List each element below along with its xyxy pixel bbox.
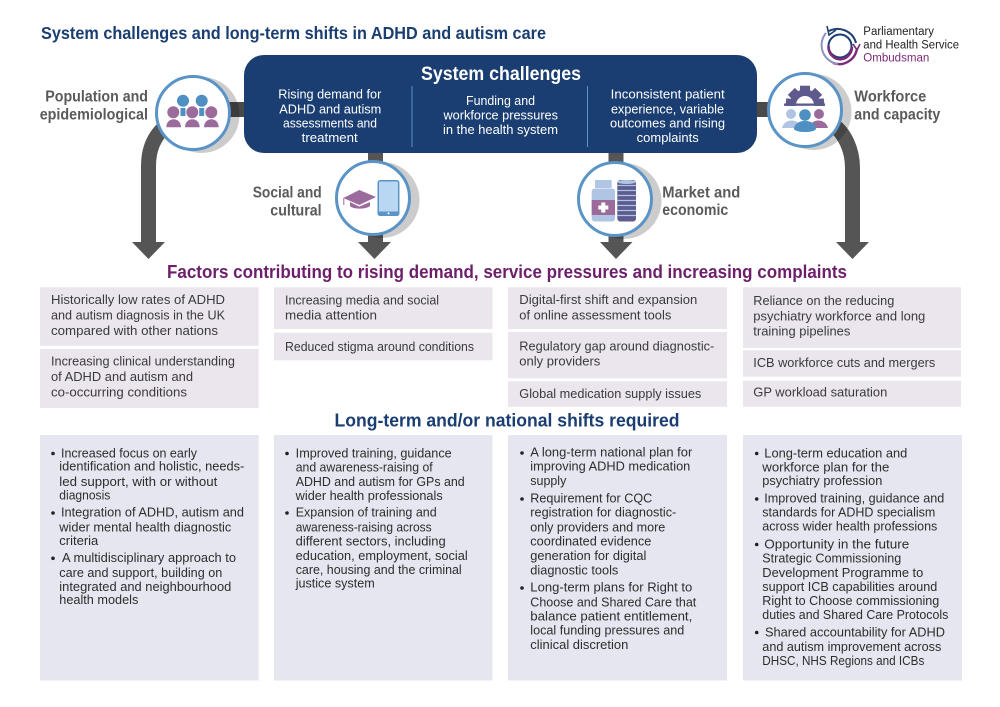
- panel: shifts, social: care, housing and the criminal: [296, 563, 462, 577]
- arrow: population and epidemiological: [132, 102, 247, 259]
- panel: shifts, population: identification and holistic, needs-: [59, 460, 244, 474]
- panel: shifts, market: only providers and more: [530, 521, 665, 535]
- panel: shifts, workforce: workforce plan for the: [761, 460, 889, 474]
- panel: factor, psychiatry workforce: [743, 287, 961, 348]
- heading: factors contributing: Factors contributing to rising demand, service pressures and increasing complaints: [167, 262, 847, 282]
- logo: Parliamentary and Health Service Ombudsman: Parliamentary: [863, 26, 934, 38]
- panel: factor, psychiatry workforce: psychiatry workforce and long: [753, 309, 925, 323]
- panel: factor, media attention: Increasing media and social: [285, 293, 439, 307]
- label: workforce and capacity: and capacity: [854, 107, 941, 124]
- panel: shifts, population: A multidisciplinary approach to: [62, 551, 236, 565]
- panel: shifts, workforce: across wider health professions: [762, 519, 937, 533]
- text: rising demand: treatment: [302, 131, 358, 145]
- panel: factor, clinical understanding: co-occurring conditions: [51, 385, 187, 399]
- logo: Parliamentary and Health Service Ombudsman: [822, 26, 959, 65]
- panel: factor, regulatory gap: only providers: [519, 355, 600, 369]
- label: population and epidemiological: [40, 89, 148, 123]
- panel: factor, reduced stigma: Reduced stigma around conditions: [285, 340, 474, 354]
- panel: shifts, workforce: psychiatry profession: [762, 474, 882, 488]
- panel: shifts, workforce: [743, 435, 962, 680]
- arrow: market and economic: [600, 150, 632, 259]
- panel: factor, digital-first shift: Digital-first shift and expansion: [519, 293, 697, 307]
- panel: shifts, social: Improved training, guidance: [296, 446, 452, 460]
- panel: shifts, social: different sectors, including: [296, 535, 446, 549]
- icon: graduation cap and tablet: [336, 162, 420, 238]
- panel: shifts, social: education, employment, social: [296, 549, 468, 563]
- panel: factor, digital-first shift: [508, 287, 727, 329]
- panel: shifts, population: Increased focus on early: [61, 446, 198, 460]
- panel: factor, ICB cuts: ICB workforce cuts and mergers: [753, 356, 935, 370]
- text: inconsistent patient experience: Inconsistent patient: [611, 87, 725, 101]
- heading: system challenges: System challenges: [421, 64, 581, 85]
- panel: system challenges: [244, 55, 757, 153]
- panel: shifts, workforce: DHSC, NHS Regions and ICBs: [762, 654, 924, 668]
- panel: shifts, population: [40, 435, 259, 680]
- panel: shifts, workforce: Development Programme to: [762, 566, 923, 580]
- label: market and economic: economic: [662, 202, 729, 219]
- panel: shifts, social: justice system: [295, 576, 375, 590]
- icon: medication bottle and coins: [578, 162, 662, 239]
- panel: shifts, population: integrated and neighbourhood: [59, 580, 231, 594]
- panel: factor, media attention: media attention: [285, 309, 377, 323]
- label: market and economic: [662, 184, 740, 219]
- panel: shifts, workforce: Shared accountability for ADHD: [765, 625, 945, 639]
- text: funding and workforce pressures: [442, 94, 558, 137]
- panel: factor, historically low rates: and autism diagnosis in the UK: [51, 308, 226, 322]
- logo: Parliamentary and Health Service Ombudsman: and Health Service: [863, 39, 959, 51]
- panel: factor, medication supply: Global medication supply issues: [519, 387, 701, 401]
- label: social and cultural: Social and: [253, 184, 322, 201]
- panel: shifts, market: Requirement for CQC: [530, 492, 652, 506]
- panel: shifts, market: balance patient entitlement,: [530, 610, 692, 624]
- panel: factor, medication supply: [508, 381, 727, 407]
- text: inconsistent patient experience: [610, 87, 725, 145]
- panel: shifts, market: Long-term plans for Right to: [530, 581, 692, 595]
- text: inconsistent patient experience: outcomes and rising: [610, 116, 725, 130]
- panel: shifts, population: Integration of ADHD, autism and: [61, 506, 244, 520]
- panel: factor, digital-first shift: of online assessment tools: [519, 308, 671, 322]
- panel: shifts, social: wider health professionals: [295, 489, 443, 503]
- text: rising demand: assessments and: [283, 116, 377, 130]
- panel: shifts, population: care and support, building on: [59, 566, 222, 580]
- panel: factor, psychiatry workforce: training pipelines: [753, 325, 850, 339]
- panel: shifts, workforce: Improved training, guidance and: [764, 492, 944, 506]
- panel: shifts, workforce: Right to Choose commissioning: [762, 594, 939, 608]
- label: market and economic: Market and: [662, 184, 740, 201]
- panel: shifts, market: supply: [530, 474, 567, 488]
- panel: shifts, population: wider mental health diagnostic: [58, 521, 231, 535]
- panel: shifts, workforce: Strategic Commissioning: [762, 551, 901, 565]
- panel: shifts, market: A long-term national plan for: [530, 446, 692, 460]
- panel: shifts, population: led support, with or without: [59, 475, 218, 489]
- icon: gear and team: [768, 74, 852, 150]
- panel: shifts, workforce: duties and Shared Care Protocols: [762, 608, 948, 622]
- panel: shifts, workforce: Opportunity in the future: [764, 537, 909, 551]
- panel: shifts, market: Choose and Shared Care that: [530, 596, 697, 610]
- panel: shifts, population: health models: [59, 593, 138, 607]
- panel: factor, historically low rates: compared with other nations: [51, 324, 218, 338]
- panel: shifts, population: criteria: [59, 534, 98, 548]
- label: population and epidemiological: epidemiological: [40, 106, 148, 123]
- panel: shifts, market: diagnostic tools: [530, 563, 618, 577]
- panel: shifts, market: [508, 435, 727, 680]
- arrow: social and cultural: [358, 150, 391, 259]
- logo: Parliamentary and Health Service Ombudsman: Ombudsman: [863, 53, 929, 65]
- panel: factor, historically low rates: [40, 287, 259, 346]
- panel: shifts, market: generation for digital: [530, 549, 646, 563]
- panel: factor, psychiatry workforce: Reliance on the reducing: [753, 294, 894, 308]
- text: funding and workforce pressures: Funding and: [466, 94, 535, 108]
- panel: shifts, workforce: support ICB capabilities around: [762, 580, 937, 594]
- panel: shifts, social: and awareness-raising of: [296, 460, 433, 474]
- panel: factor, regulatory gap: Regulatory gap around diagnostic-: [519, 339, 714, 353]
- panel: factor, clinical understanding: Increasing clinical understanding: [51, 355, 235, 369]
- panel: factor, reduced stigma: [274, 333, 492, 360]
- panel: factor, regulatory gap: [508, 332, 727, 378]
- text: inconsistent patient experience: experience, variable: [611, 102, 724, 116]
- icon: population group: [156, 76, 240, 153]
- heading: long-term shifts: Long-term and/or national shifts required: [334, 411, 680, 431]
- panel: shifts, social: awareness-raising across: [296, 521, 432, 535]
- panel: shifts, market: registration for diagnostic-: [530, 506, 676, 520]
- panel: shifts, market: local funding pressures and: [530, 624, 684, 638]
- text: rising demand: Rising demand for: [278, 87, 381, 101]
- label: workforce and capacity: [854, 88, 941, 124]
- panel: shifts, workforce: and autism improvement across: [762, 640, 941, 654]
- label: population and epidemiological: Population and: [45, 89, 148, 106]
- text: rising demand: [278, 87, 381, 145]
- text: rising demand: ADHD and autism: [279, 102, 381, 116]
- panel: shifts, market: coordinated evidence: [530, 535, 651, 549]
- panel: factor, media attention: [274, 287, 492, 329]
- arrow: workforce and capacity: [755, 102, 869, 259]
- label: social and cultural: [253, 184, 322, 220]
- label: social and cultural: cultural: [270, 203, 322, 220]
- title: System challenges and long-term shifts in ADHD and autism care: [41, 23, 546, 43]
- panel: factor, ICB cuts: [743, 350, 961, 377]
- text: funding and workforce pressures: workforce pressures: [442, 108, 558, 122]
- text: funding and workforce pressures: in the health system: [443, 123, 558, 137]
- panel: shifts, population: diagnosis: [59, 488, 110, 502]
- panel: shifts, workforce: Long-term education and: [764, 446, 907, 460]
- panel: shifts, social: ADHD and autism for GPs and: [296, 475, 465, 489]
- panel: shifts, market: clinical discretion: [530, 638, 628, 652]
- panel: shifts, workforce: standards for ADHD specialism: [762, 506, 935, 520]
- panel: shifts, market: improving ADHD medication: [530, 460, 690, 474]
- panel: factor, clinical understanding: [40, 349, 259, 408]
- panel: shifts, social: [274, 435, 492, 680]
- panel: factor, historically low rates: Historically low rates of ADHD: [51, 293, 225, 307]
- panel: shifts, social: Expansion of training and: [296, 506, 437, 520]
- text: inconsistent patient experience: complaints: [637, 131, 699, 145]
- panel: factor, GP workload: [743, 381, 961, 407]
- panel: factor, GP workload: GP workload saturation: [753, 385, 887, 399]
- label: workforce and capacity: Workforce: [854, 88, 927, 105]
- panel: factor, clinical understanding: of ADHD and autism and: [51, 370, 193, 384]
